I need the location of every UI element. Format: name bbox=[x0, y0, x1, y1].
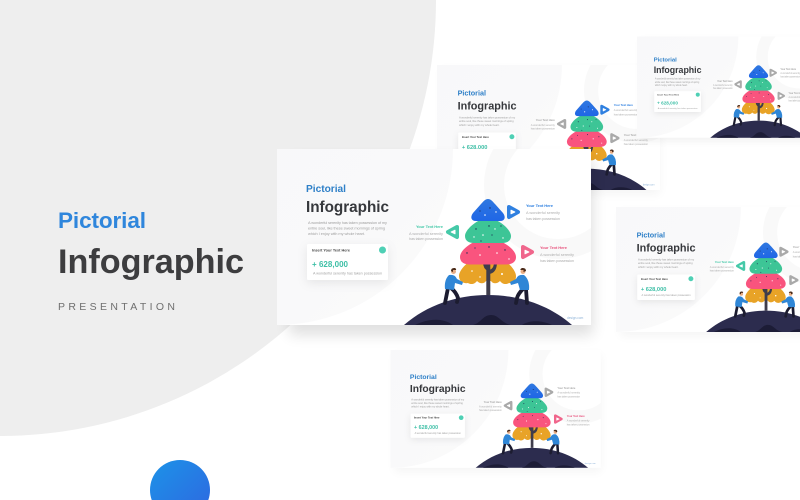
slide: top right: Insert Your Text Here bbox=[657, 94, 680, 97]
slide: right middle: A wonderful serenity has taken possession bbox=[642, 293, 691, 297]
callout: green: Your Text Here bbox=[416, 224, 444, 229]
slide: top middle: A wonderful serenity bbox=[624, 138, 648, 142]
slide: bottom: Insert Your Text Here bbox=[414, 417, 440, 420]
slide: top middle: which I enjoy with my whole heart. bbox=[459, 123, 500, 127]
slide: right middle: Insert Your Text Here bbox=[641, 277, 668, 281]
callout: pink: A wonderful serenity bbox=[540, 252, 574, 257]
slide: main bbox=[277, 149, 597, 339]
slide: top right: Infographic bbox=[654, 65, 702, 75]
blue circle bbox=[150, 460, 210, 500]
slide heading: Pictorial: Pictorial bbox=[306, 184, 346, 195]
callout: pink: has taken possession bbox=[540, 258, 574, 263]
slide: bottom: A wonderful serenity bbox=[557, 391, 581, 395]
slide: right middle: Pictorial bbox=[637, 231, 665, 240]
slide: right middle: has taken possession bbox=[710, 269, 734, 273]
body text bbox=[308, 220, 387, 236]
slide: top right: A wonderful serenity bbox=[713, 84, 733, 87]
heading: Infographic: Infographic bbox=[58, 243, 244, 281]
slide: right middle: + 628,000 bbox=[641, 287, 666, 293]
callout: green: has taken possession bbox=[409, 236, 443, 241]
slide: bottom: Infographic bbox=[410, 384, 466, 395]
slide: bottom: Your Text Here bbox=[484, 400, 502, 404]
slide: top right: Your Text Here bbox=[717, 80, 733, 83]
slide: top middle: Your Text Here bbox=[536, 118, 555, 122]
slide: top middle: A wonderful serenity bbox=[531, 123, 555, 127]
slide: right middle: entire soul, like these sweet mornings of spring bbox=[638, 261, 693, 265]
slide: top middle: has taken possession bbox=[614, 112, 638, 116]
slide: bottom: + 628,000 bbox=[414, 425, 438, 431]
slide: top right: which I enjoy with my whole heart. bbox=[655, 84, 688, 87]
slide: top middle: A wonderful serenity has taken possession bbox=[463, 151, 512, 155]
slide: top right: + 628,000 bbox=[657, 100, 678, 105]
left title block bbox=[58, 208, 244, 313]
slide: top middle: A wonderful serenity has taken possession of my bbox=[459, 115, 516, 119]
slide: top right bbox=[637, 58, 800, 140]
slide: top middle: Infographic bbox=[458, 101, 517, 113]
callout: green bbox=[409, 224, 457, 241]
slide: top middle bbox=[454, 90, 654, 190]
callout: green: A wonderful serenity bbox=[409, 231, 443, 236]
stat card: + 628,000 bbox=[312, 260, 349, 269]
slide: top right: A wonderful serenity bbox=[780, 72, 800, 75]
slide: top middle: Insert Your Text Here bbox=[462, 135, 489, 139]
slide: bottom: A wonderful serenity has taken possession of my bbox=[411, 397, 465, 401]
callout: blue: Your Text Here bbox=[526, 203, 554, 208]
slide: top middle: + 628,000 bbox=[462, 145, 487, 151]
slide: top right: Your Text Here bbox=[780, 68, 797, 71]
slide: right middle: A wonderful serenity has taken possession of my bbox=[638, 257, 695, 261]
body text: which I enjoy with my whole heart. bbox=[308, 231, 365, 236]
slide: bottom: Your Text Here bbox=[567, 414, 585, 418]
body text: A wonderful serenity has taken possession of my bbox=[308, 220, 387, 225]
slide: top right: A wonderful serenity has taken possession bbox=[658, 107, 698, 110]
slide: top middle: Pictorial bbox=[458, 89, 486, 98]
slide: top middle: has taken possession bbox=[624, 142, 648, 146]
slide: bottom: A wonderful serenity bbox=[567, 419, 590, 423]
slide: right middle: Infographic bbox=[637, 243, 696, 255]
subtitle: PRESENTATION bbox=[58, 301, 175, 313]
stat card bbox=[307, 244, 388, 280]
callout: blue: has taken possession bbox=[526, 216, 560, 221]
stat card: Insert Your Text Here bbox=[312, 248, 350, 252]
slide: top right: entire soul, like these sweet mornings of spring bbox=[655, 81, 700, 84]
slide: bottom: which I enjoy with my whole heart. bbox=[411, 405, 450, 409]
slide: bottom: Pictorial bbox=[410, 374, 437, 381]
slide: bottom: A wonderful serenity has taken possession bbox=[415, 432, 461, 435]
slide: top middle: Your Text Here bbox=[614, 103, 633, 107]
callout: pink: Your Text Here bbox=[540, 245, 568, 250]
slide heading: Infographic: Infographic bbox=[306, 199, 389, 216]
slide: right middle: Your Text Here bbox=[715, 260, 734, 264]
slide: right middle: which I enjoy with my whole heart. bbox=[638, 265, 679, 269]
watermark: design.com bbox=[567, 316, 584, 320]
callout: blue bbox=[509, 203, 560, 221]
slide: top right: Pictorial bbox=[654, 57, 677, 63]
callout: pink bbox=[523, 245, 574, 263]
slide: right middle bbox=[633, 232, 800, 332]
stat card: A wonderful serenity has taken possession bbox=[313, 272, 382, 276]
background circle bbox=[0, 0, 436, 436]
slide: top right: has taken possession bbox=[780, 75, 800, 78]
slide: right middle: A wonderful serenity bbox=[710, 265, 734, 269]
slide: bottom: has taken possession bbox=[567, 423, 590, 427]
slide: top middle: has taken possession bbox=[531, 127, 555, 131]
slide: top middle: design.com bbox=[643, 185, 655, 187]
slide: bottom: entire soul, like these sweet mornings of spring bbox=[411, 401, 463, 405]
slide: top right: has taken possession bbox=[713, 87, 733, 90]
heading: Pictorial: Pictorial bbox=[58, 208, 146, 233]
slide: top middle: A wonderful serenity bbox=[614, 108, 639, 112]
slide: bottom: design.com bbox=[585, 463, 596, 465]
slide: bottom: has taken possession bbox=[479, 408, 502, 412]
illustration: tree, people and hill bbox=[404, 199, 572, 325]
callout: blue: A wonderful serenity bbox=[526, 210, 560, 215]
slide: bottom: has taken possession bbox=[557, 395, 581, 399]
body text: entire soul, like these sweet mornings of spring bbox=[308, 226, 385, 230]
slide: top middle: Your Text Here bbox=[624, 133, 643, 137]
slide: bottom bbox=[406, 374, 596, 468]
slide: top right: A wonderful serenity has taken possession of my bbox=[655, 78, 701, 81]
slide: bottom: Your Text Here bbox=[557, 386, 576, 390]
slide: top middle: entire soul, like these sweet mornings of spring bbox=[459, 119, 514, 123]
slide: bottom: A wonderful serenity bbox=[479, 405, 502, 409]
